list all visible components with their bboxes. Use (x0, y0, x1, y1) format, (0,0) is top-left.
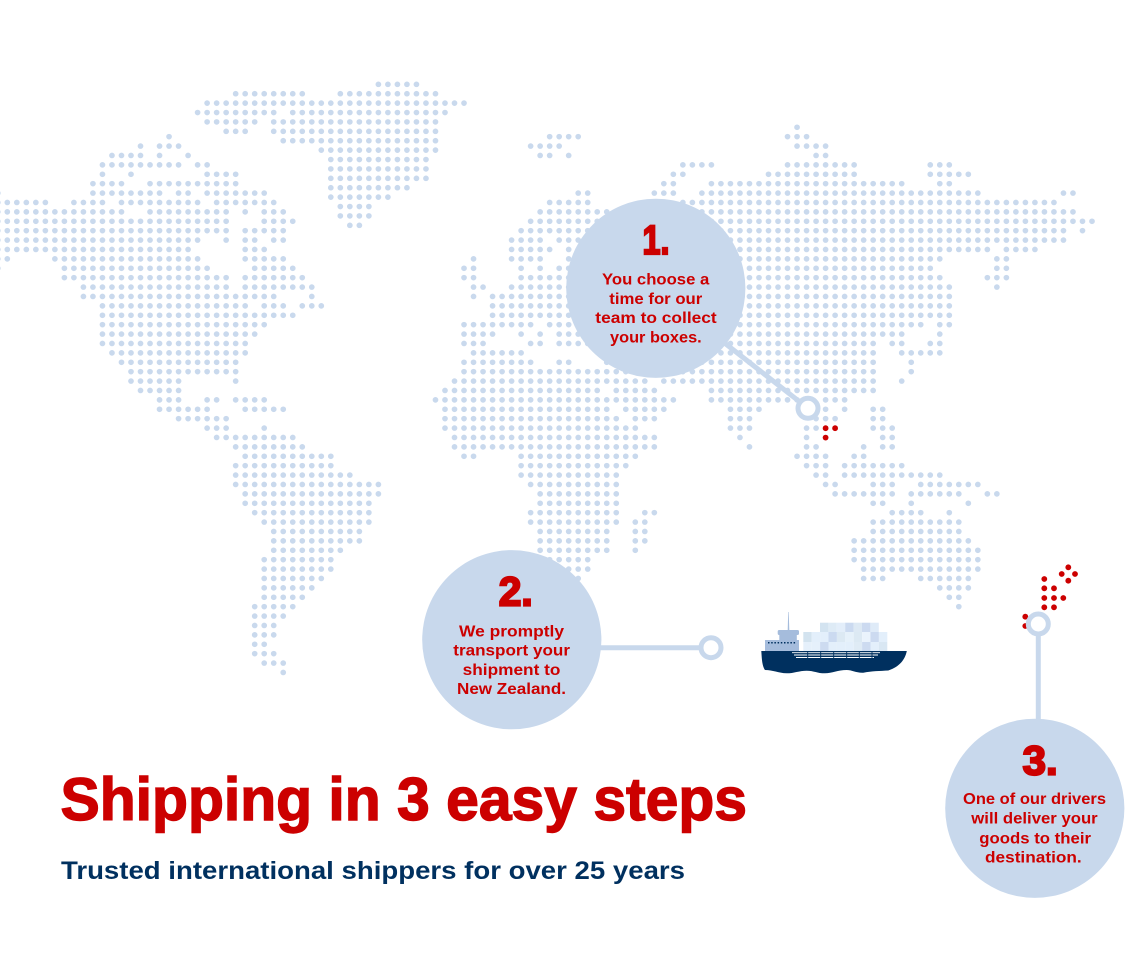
icon: container ship (761, 612, 907, 673)
step 2 description: New Zealand. (457, 681, 566, 698)
connector: step 1 line and ring (722, 341, 818, 418)
map dots: Americas, Eurasia, Africa, Australia (0, 127, 1092, 672)
map dots: Greenland (198, 84, 464, 225)
step 2 number: 2. (499, 569, 533, 615)
step 3 description: One of our drivers (963, 791, 1106, 808)
step 1 description: time for our (609, 291, 702, 308)
step 3 callout (945, 719, 1124, 898)
step 2 description: We promptly (459, 623, 564, 640)
connector: step 3 line and ring (1028, 614, 1048, 726)
step 2 callout (422, 550, 601, 729)
step 3 number: 3. (1023, 738, 1058, 784)
ship containers (803, 623, 887, 651)
step 2 description: transport your (453, 643, 570, 660)
ship superstructure and mast (765, 612, 799, 652)
dotted world map (0, 84, 1092, 672)
step 3 description: goods to their (979, 830, 1091, 847)
step 2 description (453, 623, 570, 698)
step 1 description (595, 271, 717, 346)
red dots: origin region (823, 425, 838, 440)
step 3 description (963, 791, 1106, 866)
step 3 description: will deliver your (970, 811, 1098, 828)
step 2 description: shipment to (463, 662, 561, 679)
step 1 description: your boxes. (610, 329, 702, 346)
red dots: New Zealand (1022, 564, 1078, 629)
ship hull (761, 651, 907, 673)
ship windows (768, 642, 796, 644)
step 1 description: team to collect (595, 310, 717, 327)
connector: step 2 line and ring (595, 638, 721, 658)
subtitle: Trusted international shippers for over 25 years (61, 857, 685, 885)
step 1 description: You choose a (602, 271, 709, 288)
hull deck stripes (792, 652, 880, 658)
step 3 description: destination. (985, 849, 1082, 866)
title: Shipping in 3 easy steps (60, 766, 747, 833)
step 1 number: 1. (642, 217, 670, 263)
step 1 callout (566, 199, 745, 378)
